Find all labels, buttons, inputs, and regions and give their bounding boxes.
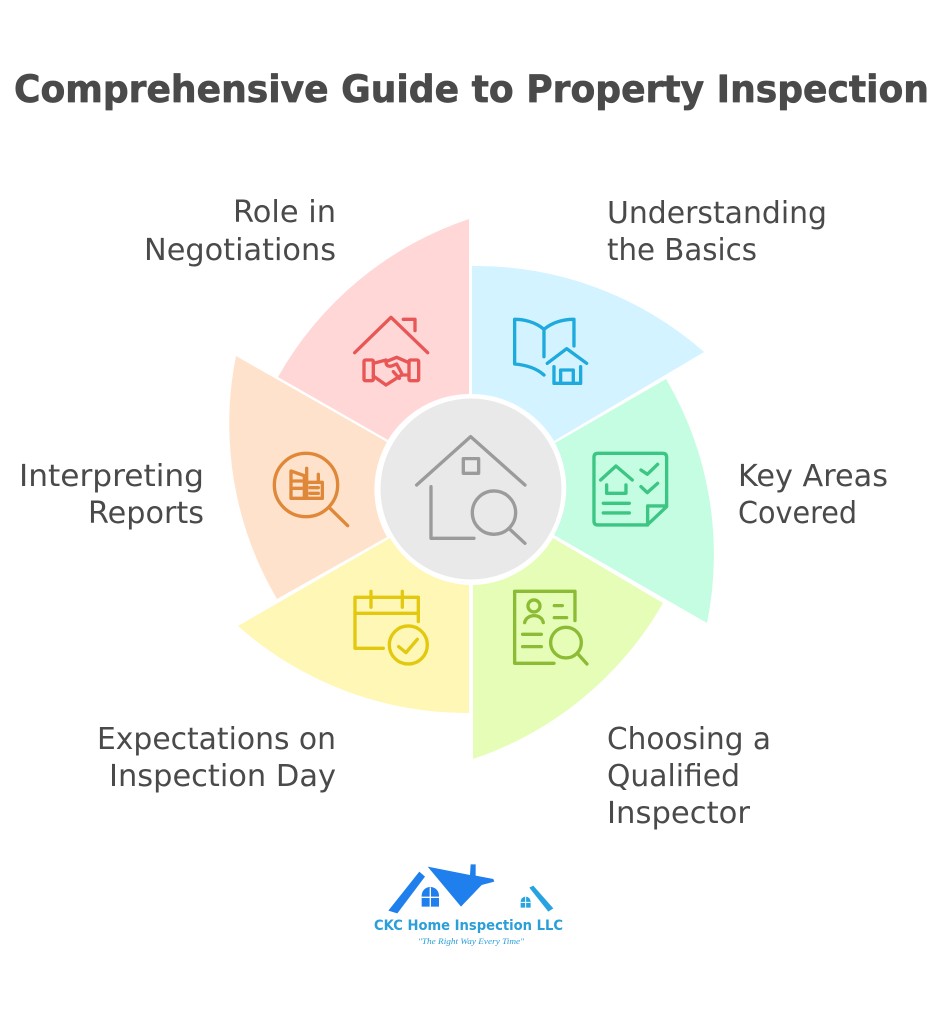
- label: understanding the basics: the Basics: [607, 233, 757, 268]
- label: interpreting reports: Interpreting: [19, 459, 204, 494]
- label: understanding the basics: Understanding: [607, 196, 827, 231]
- label: key areas covered: Key Areas: [738, 459, 888, 494]
- panel: center hub: [379, 397, 563, 581]
- label: choosing a qualified inspector: Choosing a: [607, 722, 771, 757]
- logo: CKC Home Inspection: [374, 864, 563, 946]
- label: expectations on inspection day: Expectations on: [97, 722, 336, 757]
- logo name: CKC Home Inspection LLC: [374, 918, 563, 934]
- label: expectations on inspection day: Inspection Day: [109, 759, 336, 794]
- label: understanding the basics: [607, 196, 827, 268]
- icon: magnifier over report: [274, 453, 348, 526]
- icon: logo house roofs: [388, 864, 553, 913]
- label: choosing a qualified inspector: Qualified: [607, 759, 740, 794]
- panel: key areas covered segment: [554, 379, 714, 623]
- label: interpreting reports: [19, 459, 204, 531]
- label: interpreting reports: Reports: [88, 496, 204, 531]
- label: key areas covered: Covered: [738, 496, 857, 531]
- icon: calendar with check: [355, 591, 427, 664]
- icon: house with handshake: [355, 317, 428, 385]
- label: choosing a qualified inspector: [607, 722, 771, 831]
- title: Comprehensive Guide to Property Inspection: [14, 68, 929, 111]
- icon: book with house: [515, 319, 587, 383]
- icon: profile document with magnifier: [515, 591, 587, 664]
- icon: house with magnifier: [417, 437, 525, 543]
- logo tagline: "The Right Way Every Time": [418, 937, 525, 946]
- label: key areas covered: [738, 459, 888, 531]
- panel: choosing a qualified inspector segment: [473, 538, 663, 759]
- panel: role in negotiations segment: [278, 219, 469, 440]
- label: expectations on inspection day: [97, 722, 336, 794]
- label: role in negotiations: [144, 195, 336, 268]
- icon: checklist note with house: [594, 453, 667, 525]
- label: choosing a qualified inspector: Inspector: [607, 796, 751, 831]
- panel: expectations on inspection day segment: [238, 538, 469, 713]
- panel: understanding the basics segment: [472, 266, 704, 441]
- label: role in negotiations: Negotiations: [144, 233, 336, 268]
- label: role in negotiations: Role in: [233, 195, 336, 230]
- panel: interpreting reports segment: [229, 356, 387, 599]
